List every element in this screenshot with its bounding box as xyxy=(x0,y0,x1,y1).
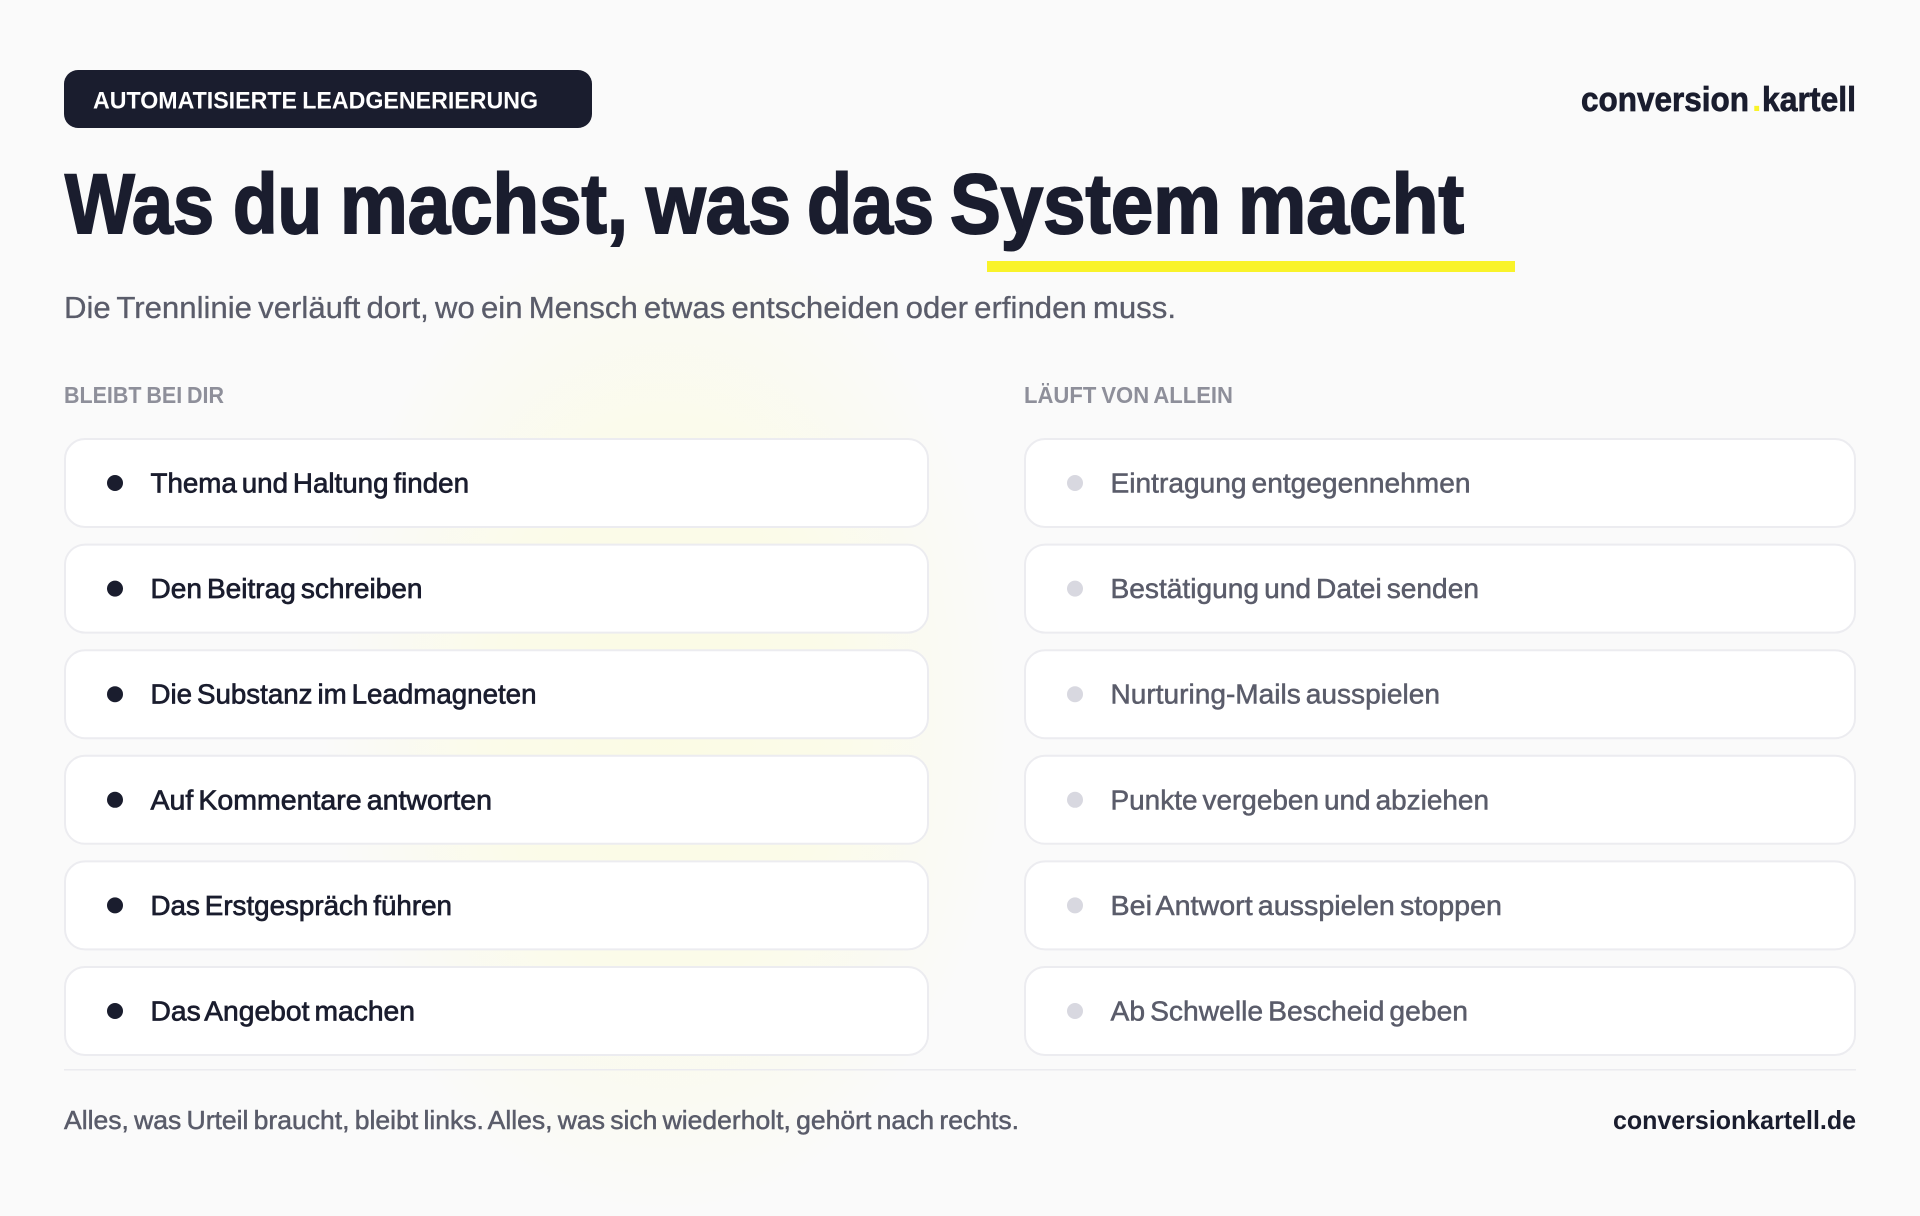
panel: bleibt bei dir xyxy=(64,382,928,1055)
label: Das Erstgespräch führen xyxy=(150,890,452,921)
title underline accent xyxy=(987,261,1515,272)
label: Thema und Haltung finden xyxy=(150,468,469,498)
title: du xyxy=(233,157,322,251)
bullet xyxy=(107,581,123,597)
card: Bei Antwort ausspielen stoppen xyxy=(1025,861,1855,949)
card: Auf Kommentare antworten xyxy=(65,756,928,844)
card: Den Beitrag schreiben xyxy=(65,545,928,633)
footer url: conversionkartell.de xyxy=(1613,1105,1856,1135)
card: Das Angebot machen xyxy=(65,967,928,1055)
title: System xyxy=(950,157,1221,251)
label: Bestätigung und Datei senden xyxy=(1110,573,1479,604)
bullet xyxy=(1067,581,1083,597)
card: Nurturing-Mails ausspielen xyxy=(1025,650,1855,738)
label: Ab Schwelle Bescheid geben xyxy=(1110,996,1468,1026)
card: Thema und Haltung finden xyxy=(65,439,928,527)
column heading: left: BLEIBT BEI DIR xyxy=(64,382,224,408)
title: Was xyxy=(65,157,214,251)
label: Punkte vergeben und abziehen xyxy=(1110,784,1489,815)
title: was xyxy=(645,157,791,251)
label: Eintragung entgegennehmen xyxy=(1110,468,1470,498)
logo: conversion.kartell xyxy=(1581,81,1856,119)
label: Das Angebot machen xyxy=(150,996,415,1026)
bullet xyxy=(107,475,123,491)
label: Den Beitrag schreiben xyxy=(150,573,422,604)
badge: Automatisierte Leadgenerierung xyxy=(64,70,592,128)
card: Ab Schwelle Bescheid geben xyxy=(1025,967,1855,1055)
card: Die Substanz im Leadmagneten xyxy=(65,650,928,738)
bullet xyxy=(1067,792,1083,808)
bullet xyxy=(1067,475,1083,491)
bullet xyxy=(107,686,123,702)
column heading: right: LÄUFT VON ALLEIN xyxy=(1024,382,1233,408)
bullet xyxy=(1067,897,1083,913)
title: machst, xyxy=(340,157,628,251)
card: Bestätigung und Datei senden xyxy=(1025,545,1855,633)
bullet xyxy=(1067,686,1083,702)
subtitle: Die Trennlinie verläuft dort, wo ein Mensch etwas entscheiden oder erfinden muss. xyxy=(64,290,1176,325)
logo: conversion.kartell: kartell xyxy=(1762,81,1856,119)
title: macht xyxy=(1238,157,1464,251)
card: Punkte vergeben und abziehen xyxy=(1025,756,1855,844)
badge: Automatisierte Leadgenerierung: AUTOMATISIERTE LEADGENERIERUNG xyxy=(93,88,538,114)
bullet xyxy=(107,792,123,808)
title: das xyxy=(807,157,934,251)
logo: conversion.kartell: . xyxy=(1752,81,1761,119)
label: Die Substanz im Leadmagneten xyxy=(150,679,536,710)
label: Bei Antwort ausspielen stoppen xyxy=(1110,890,1502,921)
bullet xyxy=(107,1003,123,1019)
card: Eintragung entgegennehmen xyxy=(1025,439,1855,527)
bullet xyxy=(1067,1003,1083,1019)
panel: läuft von allein xyxy=(1024,382,1855,1055)
logo: conversion.kartell: conversion xyxy=(1581,81,1749,119)
footer note: Alles, was Urteil braucht, bleibt links. Alles, was sich wiederholt, gehört nach rechts. xyxy=(64,1105,1019,1135)
label: Auf Kommentare antworten xyxy=(150,784,492,815)
card: Das Erstgespräch führen xyxy=(65,861,928,949)
title xyxy=(65,157,1464,251)
bullet xyxy=(107,897,123,913)
label: Nurturing-Mails ausspielen xyxy=(1110,679,1440,710)
